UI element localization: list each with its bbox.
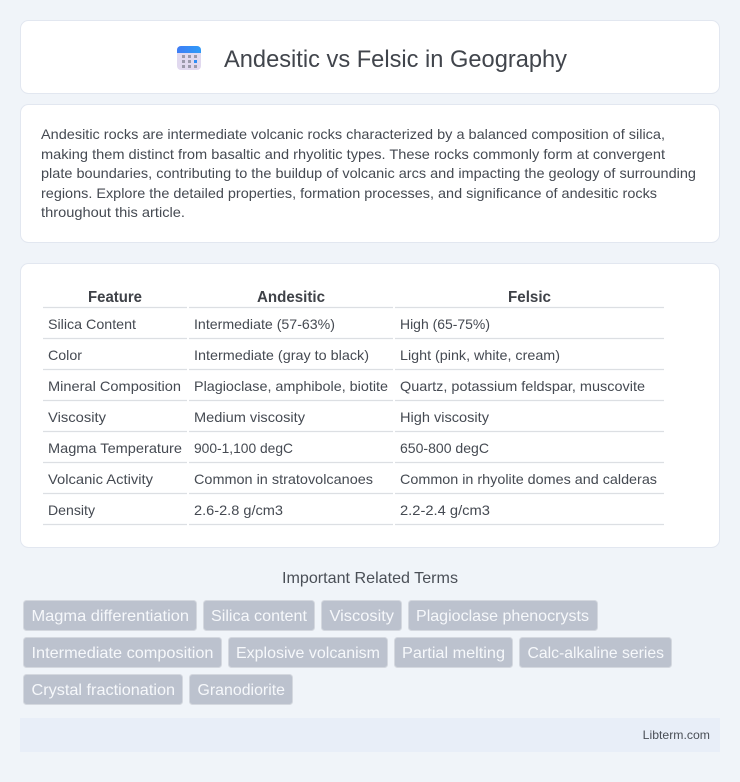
tag: explosive volcanism xyxy=(228,638,388,668)
row: mineral composition: Mineral Composition xyxy=(48,378,181,394)
tag: plagioclase phenocrysts xyxy=(408,600,598,630)
description text: making them distinct from basaltic and rhyolitic types. These rocks commonly form at convergent xyxy=(41,146,665,162)
row: density: 2.6-2.8 g/cm3 xyxy=(194,502,283,518)
tag: granodiorite xyxy=(190,674,292,704)
tag: explosive volcanism: Explosive volcanism xyxy=(236,645,380,662)
tag: plagioclase phenocrysts: Plagioclase phenocrysts xyxy=(416,608,589,625)
row: mineral composition: Quartz, potassium feldspar, muscovite xyxy=(400,378,645,394)
row: color: Intermediate (gray to black) xyxy=(194,347,369,363)
tag: viscosity: Viscosity xyxy=(330,608,394,625)
title: Andesitic vs Felsic in Geography xyxy=(224,46,567,73)
row: viscosity: High viscosity xyxy=(400,409,489,425)
tag: calc-alkaline series: Calc-alkaline series xyxy=(528,645,664,662)
tag: granodiorite: Granodiorite xyxy=(198,682,285,699)
row: volcanic activity: Common in stratovolcanoes xyxy=(194,471,373,487)
row: density: 2.2-2.4 g/cm3 xyxy=(400,502,490,518)
table panel xyxy=(20,264,720,548)
tag: magma differentiation xyxy=(24,600,196,630)
related terms heading: Important Related Terms xyxy=(282,570,458,587)
row: silica content: High (65-75%) xyxy=(400,316,490,332)
row: density: Density xyxy=(48,502,95,518)
tag: partial melting: Partial melting xyxy=(402,645,505,662)
tag: crystal fractionation xyxy=(24,674,182,704)
table header: Andesitic xyxy=(257,289,325,306)
tag: silica content xyxy=(204,600,314,630)
row: magma temperature xyxy=(43,440,664,462)
row: viscosity: Medium viscosity xyxy=(194,409,305,425)
description panel xyxy=(20,104,720,242)
row: color: Color xyxy=(48,347,82,363)
row: color xyxy=(43,347,664,370)
row: volcanic activity: Common in rhyolite domes and calderas xyxy=(400,471,657,487)
tag: crystal fractionation: Crystal fractionation xyxy=(32,682,175,699)
tag: intermediate composition xyxy=(24,638,222,668)
tag: intermediate composition: Intermediate composition xyxy=(32,645,214,662)
row: silica content: Intermediate (57-63%) xyxy=(194,316,335,332)
icon: calendar xyxy=(177,46,201,70)
tag: viscosity xyxy=(322,600,402,630)
row: viscosity xyxy=(43,409,664,432)
description text: Andesitic rocks are intermediate volcanic rocks characterized by a balanced composition of silica, xyxy=(41,126,665,142)
tag: silica content: Silica content xyxy=(211,608,308,625)
row: magma temperature: Magma Temperature xyxy=(48,440,182,456)
table header: Feature xyxy=(88,289,142,306)
tags: related terms xyxy=(24,600,672,704)
row: color: Light (pink, white, cream) xyxy=(400,347,560,363)
row: magma temperature: 900-1,100 degC xyxy=(194,440,293,456)
tag: calc-alkaline series xyxy=(520,638,672,668)
description text: throughout this article. xyxy=(41,204,185,220)
table header: Felsic xyxy=(508,289,551,306)
row: mineral composition: Plagioclase, amphibole, biotite xyxy=(194,378,388,394)
row: silica content: Silica Content xyxy=(48,316,136,332)
header panel xyxy=(20,20,720,94)
description text: regions. Explore the detailed properties, formation processes, and significance of andesitic rocks xyxy=(41,185,657,201)
table header xyxy=(43,289,664,308)
row: density xyxy=(43,502,664,524)
row: volcanic activity: Volcanic Activity xyxy=(48,471,153,487)
footer xyxy=(20,718,720,752)
description text: plate boundaries, contributing to the buildup of volcanic arcs and impacting the geology of surrounding xyxy=(41,165,696,181)
row: silica content xyxy=(43,316,664,338)
tag: magma differentiation: Magma differentiation xyxy=(32,608,189,625)
tag: partial melting xyxy=(394,638,512,668)
row: mineral composition xyxy=(43,378,664,400)
row: magma temperature: 650-800 degC xyxy=(400,440,489,456)
row: viscosity: Viscosity xyxy=(48,409,106,425)
description text xyxy=(41,126,696,220)
row: volcanic activity xyxy=(43,471,664,494)
footer credit: Libterm.com xyxy=(643,728,710,742)
